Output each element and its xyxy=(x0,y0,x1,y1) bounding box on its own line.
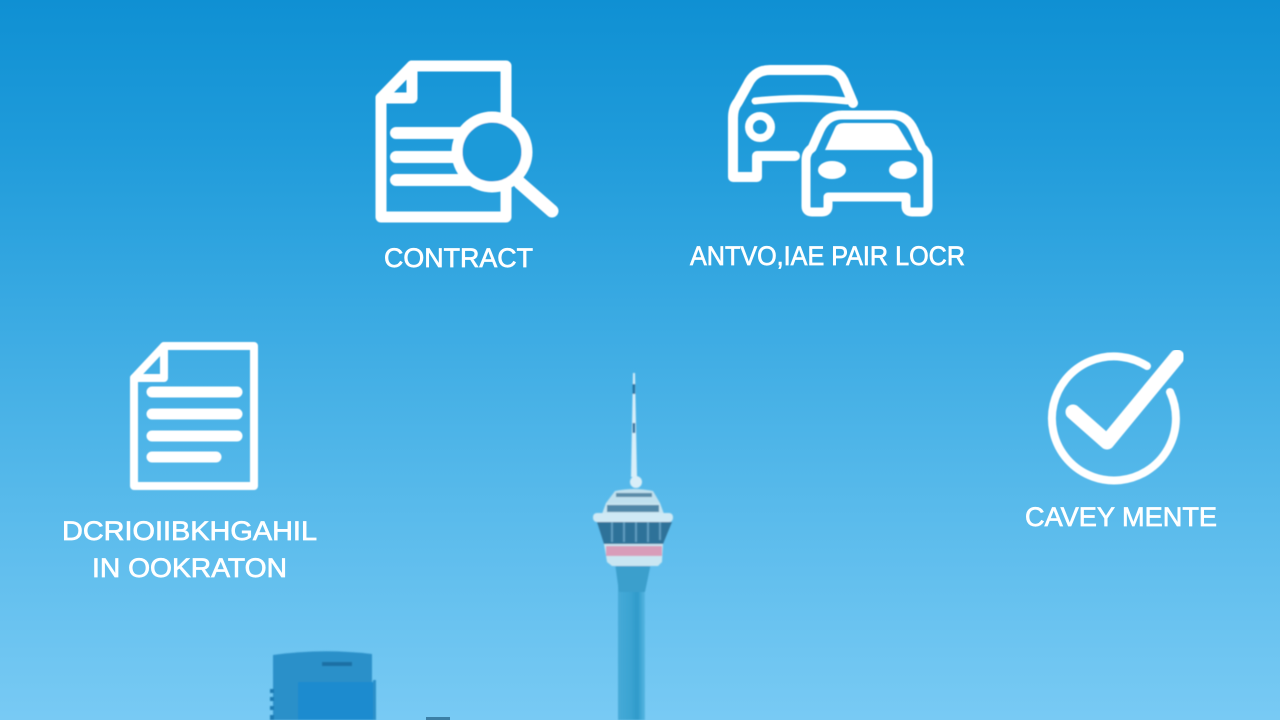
icon: document xyxy=(134,346,254,486)
label: document: DCRIOIIBKHGAHIL xyxy=(62,516,317,546)
icon: contract document with magnifier xyxy=(381,66,552,217)
label: contract: CONTRACT xyxy=(384,243,533,273)
tower xyxy=(593,373,673,720)
icon: two cars xyxy=(733,70,928,212)
label: check: CAVEY MENTE xyxy=(1025,502,1217,532)
label: cars: ANTVO,IAE PAIR LOCR xyxy=(690,241,965,271)
label: document xyxy=(62,516,317,583)
building left xyxy=(270,651,376,720)
label: document: IN OOKRATON xyxy=(92,553,287,583)
distant rooftop xyxy=(426,717,450,720)
icon: check mark in circle xyxy=(1052,356,1177,480)
